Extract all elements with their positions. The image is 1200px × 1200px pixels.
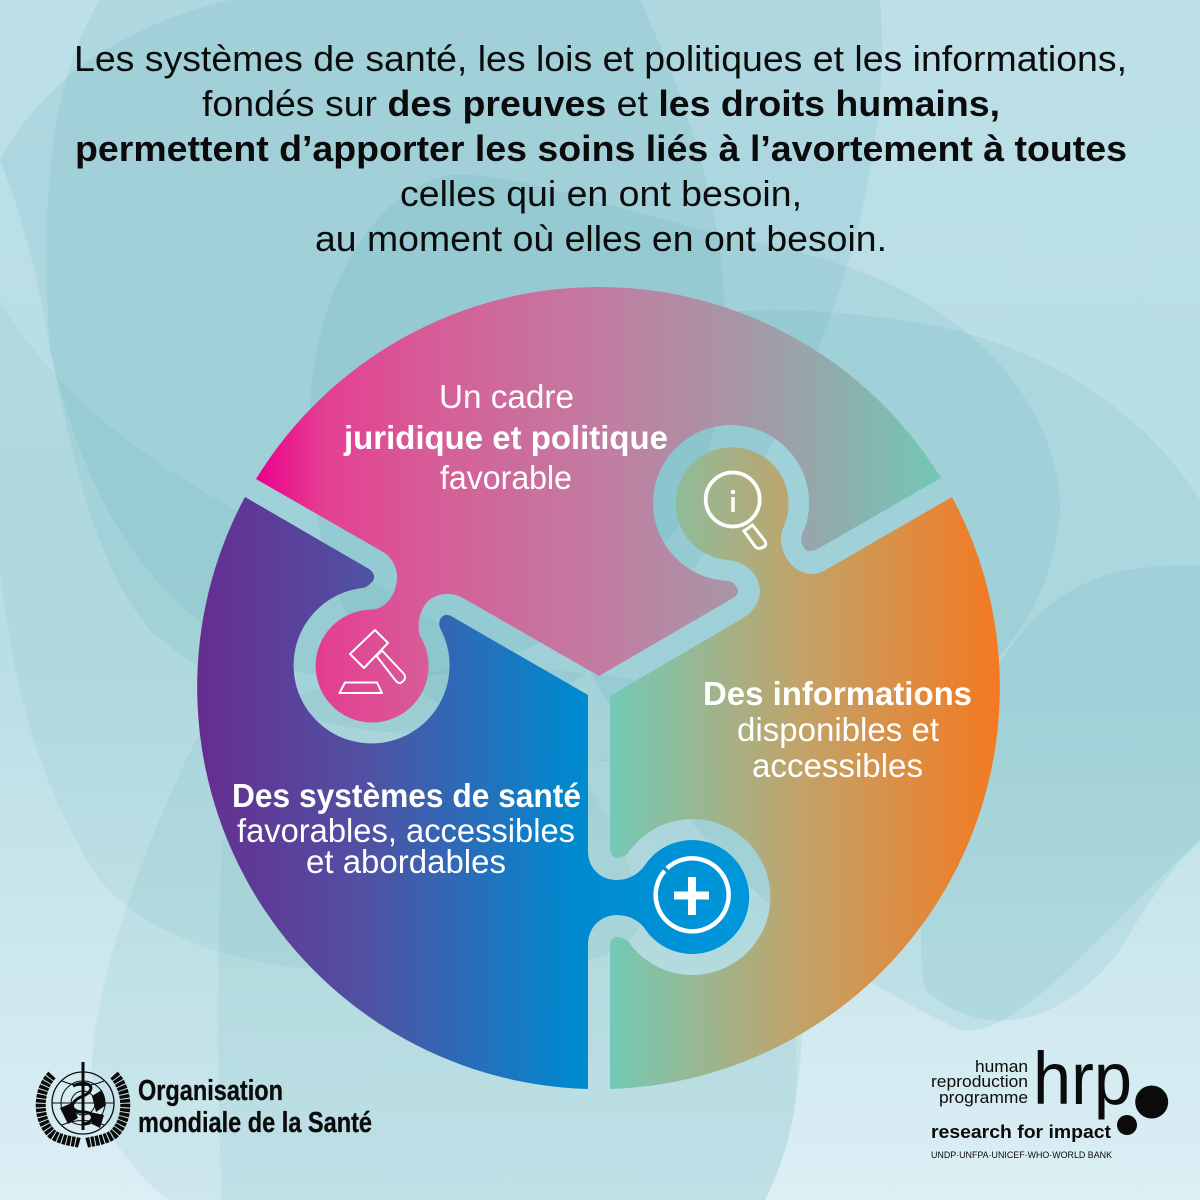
puzzle circle [197,287,1000,1089]
text: cadre: Un cadre [439,378,574,415]
icon: small dot [1117,1115,1137,1135]
text: cadre [343,378,668,496]
text: hrp: hrp [1033,1037,1132,1120]
logo: Organisation mondiale de la Santé [41,1062,372,1143]
text: informations: accessibles [752,747,923,784]
text: human reproduction programme [931,1057,1028,1107]
text: Organisation mondiale de la Santé [138,1075,372,1139]
icon: large dot [1135,1086,1168,1118]
text: human reproduction programme: reproduction [931,1072,1028,1091]
text: research for impact: research for impact [931,1122,1111,1142]
text: Organisation mondiale de la Santé: Organisation [138,1075,283,1107]
text: informations [703,675,972,784]
text: human reproduction programme: human [975,1057,1028,1076]
panel: informations [610,447,1000,1089]
logo: hrp [931,1037,1168,1161]
text: Organisation mondiale de la Santé: mondiale de la Santé [138,1107,372,1139]
text: informations: disponibles et [737,711,939,748]
icon: magnifier [706,472,766,548]
text: systèmes [232,777,581,880]
text: partners: UNDP·UNFPA·UNICEF·WHO·WORLD BANK [931,1150,1113,1161]
text: cadre: juridique et politique [343,419,668,456]
text: informations: Des informations [703,675,972,712]
icon: medical cross [656,858,729,931]
panel: cadre juridique et politique [256,287,941,722]
title [74,38,1127,259]
title: au moment où elles en ont besoin. [315,218,887,259]
title: Les systèmes de santé, les lois et politiques et les informations, [74,38,1127,79]
text: cadre: favorable [440,459,572,496]
title: celles qui en ont besoin, [400,173,802,214]
text: systèmes: et abordables [306,843,506,880]
text: human reproduction programme: programme [939,1088,1028,1107]
title: permettent d’apporter les soins liés à l’avortement à toutes [75,128,1127,169]
title: fondés sur des preuves et les droits humains, [202,83,1000,124]
icon: WHO emblem [41,1062,125,1143]
panel: systèmes de santé [197,497,749,1089]
icon: gavel [340,630,405,693]
text: systèmes: favorables, accessibles [237,812,575,849]
text: systèmes: Des systèmes de santé [232,777,581,814]
